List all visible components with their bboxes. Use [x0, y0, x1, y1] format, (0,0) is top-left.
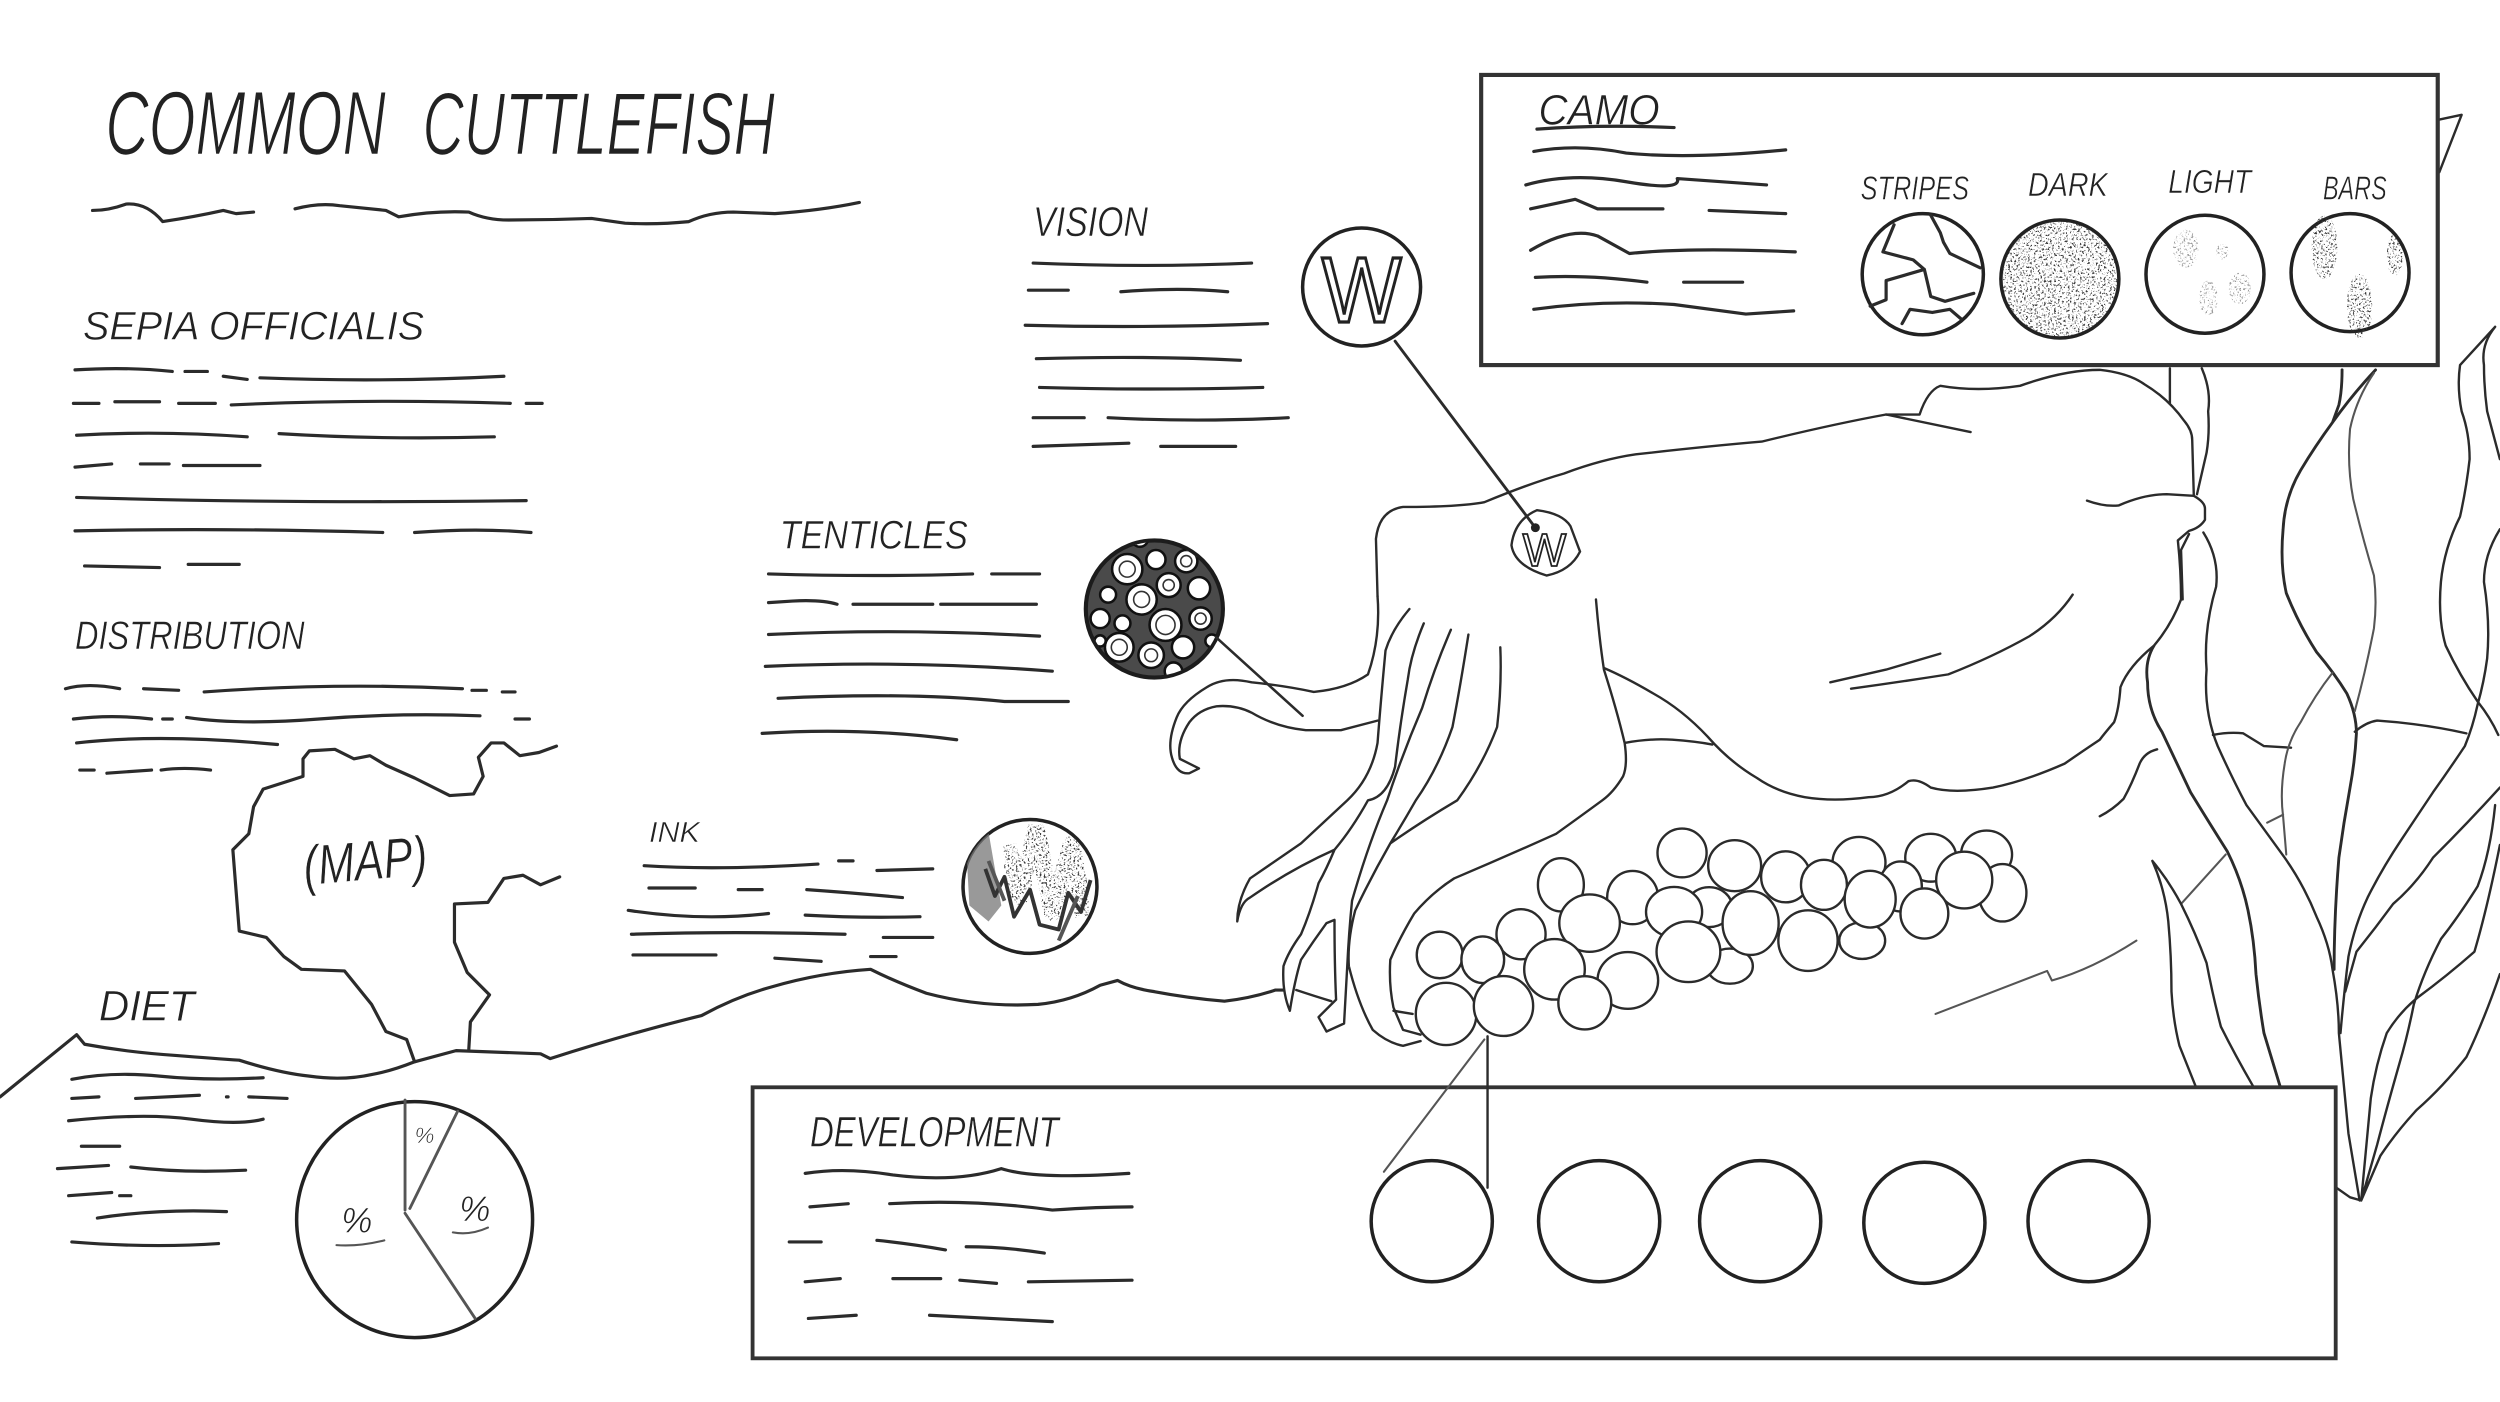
cuttlefish — [1170, 370, 2205, 1046]
map — [233, 743, 560, 1062]
body scribble lines — [1526, 148, 1795, 314]
stage circle 5 — [2028, 1161, 2149, 1282]
map coast north — [233, 743, 556, 1062]
title word: cuttlefish: CUTTLEFISH — [423, 74, 775, 174]
head edge — [1390, 599, 1626, 1035]
swatch: stripes — [1862, 214, 1983, 335]
light speckle — [2173, 230, 2251, 316]
pie outline — [297, 1102, 533, 1338]
heading: development: DEVELOPMENT — [810, 1108, 1061, 1156]
back eggs — [1708, 840, 1761, 891]
leader dot: vision — [1531, 523, 1540, 532]
body scribble lines — [65, 686, 529, 773]
ink scribbles — [966, 829, 1091, 941]
faint leader — [1384, 1039, 1484, 1172]
heading: sepia officialis: SEPIA OFFICIALIS — [83, 305, 425, 349]
dark circle — [2001, 220, 2119, 338]
heading: vision: VISION — [1033, 198, 1148, 245]
camo heading underline — [1537, 126, 1674, 129]
body scribble lines — [628, 861, 933, 961]
stripes cracks — [1870, 215, 1980, 324]
swatch: dark — [2001, 220, 2119, 338]
title — [105, 74, 775, 175]
stage circle 3 — [1700, 1161, 1821, 1282]
heading: diet: DIET — [99, 982, 197, 1030]
dark speckle — [2002, 222, 2117, 336]
corner frond tip — [2439, 115, 2462, 172]
panel: vision text — [1025, 198, 1288, 446]
percent label right: % — [459, 1190, 490, 1229]
strand centre — [2282, 370, 2376, 969]
light circle — [2146, 215, 2264, 333]
text block: distribution — [65, 614, 529, 773]
pie chart: diet — [297, 1100, 533, 1338]
body scribble lines — [789, 1169, 1132, 1322]
strands far right — [2340, 327, 2500, 1033]
label: stripes: STRIPES — [1861, 170, 1969, 207]
map label: (MAP) — [300, 824, 430, 897]
percent underlines — [336, 1228, 488, 1245]
camo box — [1481, 75, 2438, 365]
body scribble lines — [73, 369, 542, 568]
title underline — [93, 202, 859, 224]
stage circle 1 — [1371, 1161, 1492, 1282]
heading: tentacles: TENTICLES — [780, 513, 968, 557]
solid leader — [1487, 1036, 1489, 1188]
rock outline behind — [1625, 721, 2466, 816]
map coast south — [454, 875, 560, 1049]
pie dividers — [405, 1100, 475, 1318]
heading: distribution: DISTRIBUTION — [75, 614, 305, 658]
panel: ink text — [628, 817, 933, 961]
heading: camo: CAMO — [1539, 86, 1660, 134]
swatch: light — [2146, 215, 2264, 333]
panel: development — [753, 1087, 2336, 1358]
leader: vision — [1395, 341, 1535, 528]
seabed line — [0, 969, 1283, 1097]
leaf lower left — [2152, 861, 2253, 1086]
bars circle — [2291, 214, 2409, 332]
seaweed — [2147, 115, 2500, 1200]
dark circle — [1086, 540, 1223, 678]
strand thick left — [2147, 646, 2280, 1086]
body scribble lines — [762, 574, 1068, 740]
title word: common: COMMON — [105, 74, 386, 175]
panel: diet text — [57, 982, 287, 1246]
body scribble lines — [1025, 263, 1288, 446]
front eggs — [1646, 887, 1702, 937]
ink outline — [963, 819, 1097, 953]
body scribble lines — [57, 1074, 287, 1246]
arms fill — [1237, 596, 1625, 1041]
text block: sepia officialis — [73, 305, 542, 568]
arms — [1237, 609, 1501, 1046]
eye outline — [1511, 510, 1580, 576]
eye — [1511, 510, 1580, 576]
stage circle 4 — [1864, 1162, 1985, 1283]
swatch: bars — [2291, 214, 2409, 338]
icon: vision circle W — [1303, 228, 1421, 346]
percent label top: % — [415, 1123, 434, 1148]
icon: ink circle — [963, 819, 1097, 953]
mantle fold and fin — [1830, 415, 2194, 689]
seabed rocks — [1625, 721, 2466, 1014]
mantle body — [1376, 370, 2205, 800]
sucker rings — [1089, 542, 1216, 675]
heading: ink: INK — [649, 817, 702, 849]
strands lower right fan — [2334, 788, 2500, 1200]
label: bars: BARS — [2323, 170, 2387, 207]
stripes circle — [1862, 214, 1983, 335]
label: dark: DARK — [2028, 167, 2109, 204]
stage circle 2 — [1539, 1161, 1660, 1282]
leader: tentacle — [1217, 638, 1303, 716]
egg leader lines — [1384, 1036, 1488, 1188]
percent label left: % — [341, 1201, 372, 1240]
long tentacle — [1170, 596, 1378, 773]
panel: camo — [1481, 75, 2438, 365]
panel: tentacles text — [762, 513, 1068, 740]
label: light: LIGHT — [2168, 164, 2253, 201]
bars speckle — [2312, 215, 2403, 338]
seabed under arms — [1296, 990, 1413, 1014]
upper stems behind body — [2170, 368, 2209, 494]
W mark: W — [1322, 238, 1401, 342]
eggs cluster — [1416, 829, 2026, 1045]
development box — [753, 1087, 2336, 1358]
circle — [1303, 228, 1421, 346]
rock lines — [1936, 815, 2283, 1014]
eye W pupil: W — [1523, 524, 1567, 576]
strand long grey — [2203, 532, 2360, 1200]
icon: tentacle sucker texture — [1086, 531, 1223, 680]
strand grey inner — [2282, 373, 2376, 855]
